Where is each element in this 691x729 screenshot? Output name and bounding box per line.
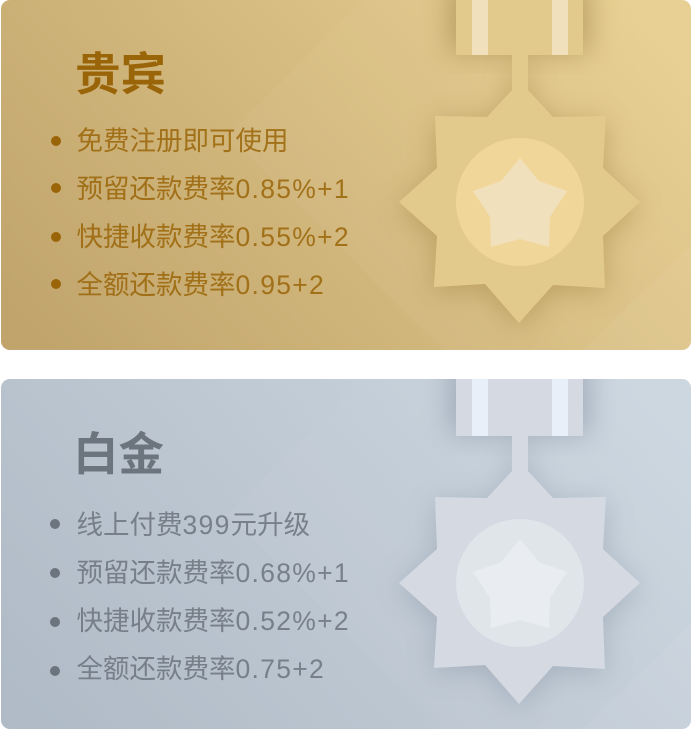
title: platinum tier: 白金 (73, 429, 164, 480)
benefits list: platinum tier: 预留还款费率0.68%+1 (76, 558, 350, 588)
benefits list: gold tier: 全额还款费率0.95+2 (76, 270, 325, 300)
card background (1, 379, 691, 729)
title: gold tier: 贵宾 (75, 49, 166, 100)
icon: gold medal (399, 0, 640, 328)
benefits list: gold tier: 快捷收款费率0.55%+2 (76, 222, 350, 252)
benefits list: gold tier (51, 126, 350, 300)
panel: platinum membership card (1, 359, 691, 729)
benefits list: platinum tier: 全额还款费率0.75+2 (76, 654, 325, 684)
benefits list: platinum tier (50, 510, 350, 684)
panel: gold membership card (1, 0, 691, 350)
benefits list: gold tier: 预留还款费率0.85%+1 (76, 174, 350, 204)
icon: platinum medal (399, 359, 640, 709)
card background (1, 0, 691, 350)
benefits list: platinum tier: 线上付费399元升级 (76, 510, 310, 540)
benefits list: gold tier: 免费注册即可使用 (76, 126, 288, 156)
benefits list: platinum tier: 快捷收款费率0.52%+2 (76, 606, 350, 636)
